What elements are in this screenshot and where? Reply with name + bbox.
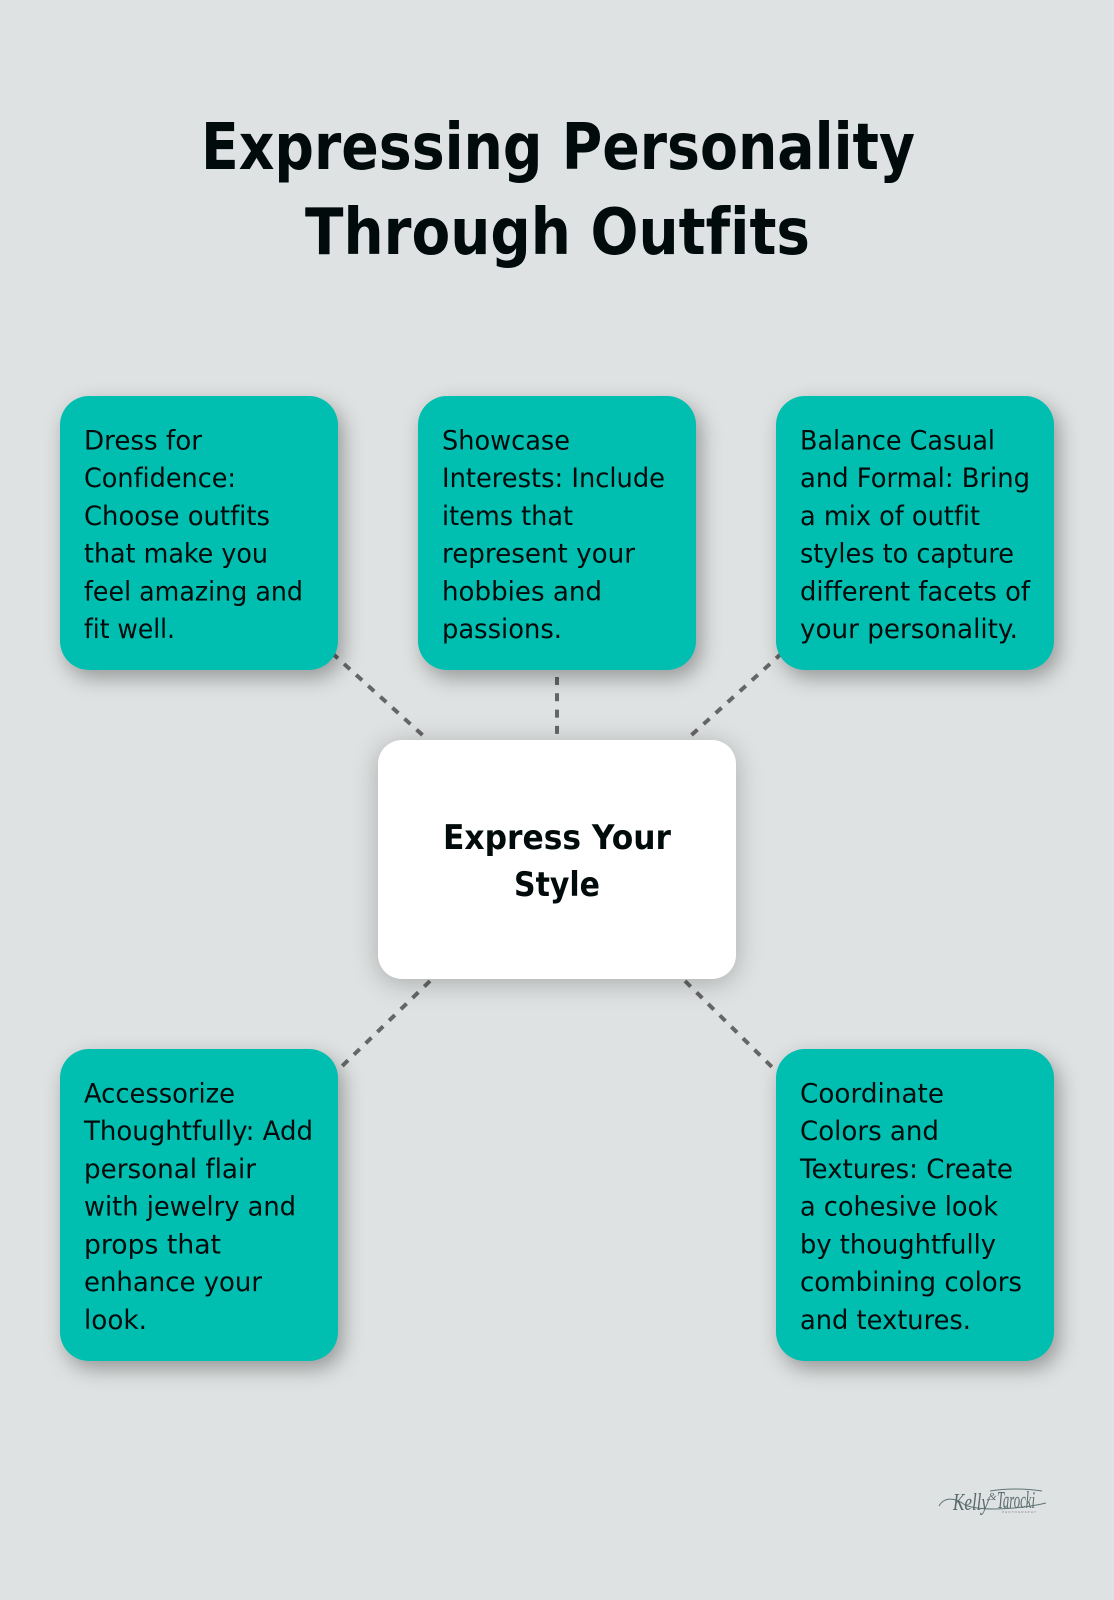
panel: coordinate colors and textures: Colors and	[800, 1116, 939, 1147]
panel: balance casual and formal: a mix of outfit	[800, 501, 980, 532]
panel: coordinate colors and textures: combining colors	[800, 1267, 1022, 1298]
logo: signature: &	[988, 1491, 997, 1503]
panel: balance casual and formal: Balance Casual	[800, 426, 995, 456]
panel: dress for confidence: that make you	[84, 539, 268, 570]
panel: accessorize thoughtfully: with jewelry and	[84, 1192, 296, 1223]
title	[201, 111, 915, 270]
panel: showcase interests: represent your	[442, 539, 636, 570]
panel: accessorize thoughtfully: props that	[84, 1230, 221, 1260]
panel: accessorize thoughtfully	[60, 1049, 338, 1361]
panel: balance casual and formal: different facets of	[800, 576, 1031, 608]
panel: balance casual and formal: and Formal: Bring	[800, 463, 1030, 494]
panel: balance casual and formal: styles to capture	[800, 539, 1014, 570]
logo: signature	[939, 1488, 1046, 1516]
panel: showcase interests	[418, 396, 696, 670]
panel: accessorize thoughtfully: look.	[84, 1305, 147, 1336]
panel: dress for confidence: Choose outfits	[84, 501, 270, 532]
panel: coordinate colors and textures	[776, 1049, 1054, 1361]
panel: showcase interests: hobbies and	[442, 576, 602, 608]
panel: coordinate colors and textures: Coordinate	[800, 1078, 944, 1110]
logo: signature: Tarocki	[997, 1488, 1035, 1514]
panel: coordinate colors and textures: and textures.	[800, 1305, 971, 1336]
panel: center node: Express Your	[443, 818, 671, 858]
panel: center node	[378, 740, 736, 979]
panel: balance casual and formal	[776, 396, 1054, 670]
title: Through Outfits	[305, 196, 810, 270]
panel: accessorize thoughtfully: Accessorize	[84, 1078, 235, 1110]
panel: showcase interests: passions.	[442, 614, 562, 645]
panel: coordinate colors and textures: Textures: Create	[799, 1154, 1013, 1185]
panel: accessorize thoughtfully: enhance your	[84, 1267, 263, 1298]
panel: accessorize thoughtfully: personal flair	[84, 1154, 257, 1185]
panel: dress for confidence: Dress for	[84, 426, 203, 456]
title: Expressing Personality	[201, 111, 915, 185]
logo: signature: PHOTOGRAPHY	[1002, 1510, 1036, 1514]
panel: balance casual and formal: your personality.	[800, 614, 1018, 645]
panel: showcase interests: Interests: Include	[442, 463, 665, 494]
panel: coordinate colors and textures: a cohesive look	[800, 1192, 998, 1223]
panel: showcase interests: items that	[442, 501, 573, 532]
connector lines	[332, 653, 782, 1072]
panel: dress for confidence	[60, 396, 338, 670]
panel: accessorize thoughtfully: Thoughtfully: Add	[83, 1116, 313, 1147]
panel: dress for confidence: Confidence:	[84, 463, 236, 494]
panel: dress for confidence: fit well.	[84, 614, 175, 645]
panel: coordinate colors and textures: by thoughtfully	[800, 1230, 996, 1260]
logo: signature: Kelly	[952, 1490, 989, 1516]
panel: showcase interests: Showcase	[442, 426, 570, 456]
panel: dress for confidence: feel amazing and	[84, 576, 303, 608]
panel: center node: Style	[514, 865, 600, 905]
